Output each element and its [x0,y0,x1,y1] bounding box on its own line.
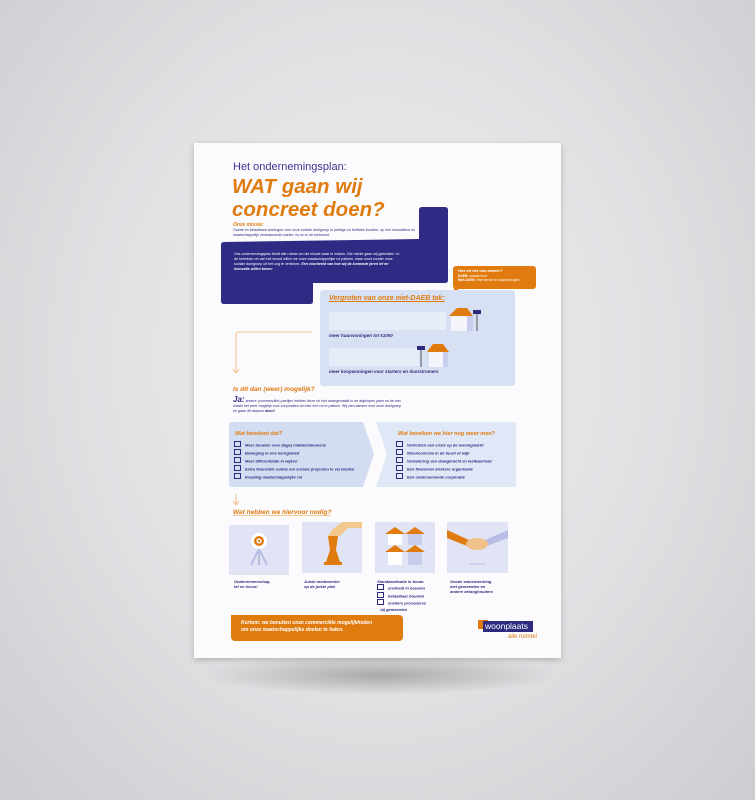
title: concreet doen? [232,198,385,221]
chevron panel right [376,422,516,487]
chevron panel left: Meer differentiatie in wijken [245,458,297,464]
text: betaalbaar bouwen [388,593,424,598]
text: snelheid in bouwen [388,586,425,590]
icon: house 2 [417,344,449,367]
text: Goede samenwerking [450,579,491,584]
captions: lef en focus! [234,584,258,589]
text: Standaardisatie in bouw: bij gemeenten [377,579,424,612]
text ja: Ja: andere (commerciële) partijen hebben deze rol niet waargemaakt in de afgelopen jaren en de wet maakt het weer mogelijk voor corporaties om hier een rol te pakken. Wij zien kansen voor onze doelgroep en gaan dit daarom doen! [233,395,401,413]
callout orange: DAEB: sociale huur [458,274,487,278]
icon: handshake [447,522,508,573]
mission text: Onze missie: [233,222,264,228]
chevron panel right: Verlichten van crisis op de woningmarkt [407,442,484,448]
icon: house [449,308,481,331]
heading mogelijk: Is dit dan (weer) mogelijk? [233,386,315,393]
text: andere belanghouders [450,589,493,594]
logo: alle ruimte! [508,634,537,640]
icon: chess [302,522,362,573]
heading nodig: Wat hebben we hiervoor nodig? [233,509,331,516]
chevron panel left: Beweging in ons kerngebied [245,450,299,456]
panel niet-DAEB: meer huurwoningen tot €1000 [329,333,393,338]
chevron panel left [229,422,374,487]
mission text [233,222,415,237]
navy block [221,207,448,304]
chevron panel left: Invulling maatschappelijke rol [245,474,302,480]
bottom callout: Kortom: we benutten onze commerciële mogelijkheden [241,620,372,626]
title: WAT gaan wij [232,175,363,198]
icon: houses puzzle [375,522,435,573]
panel niet-DAEB: meer koopwoningen voor starters en doorstromers [329,369,439,374]
mission text: Goede en betaalbare woningen voor onze sociale doelgroep in prettige en leefbare buurten, op een innovatieve en maatschappelijk verantwoorde manier, nu en in de toekomst. [233,228,415,237]
chevron panel left: Extra financiële ruimte om sociale projecten te versnellen [245,466,354,472]
chevron panel right: Een ondernemende corporatie [407,474,465,480]
chevron panel right: Woonconcisie in de buurt of wijk [407,450,469,456]
title [232,175,385,221]
text: op de juiste plek [304,584,335,589]
arrow orange elbow [232,332,312,374]
arrow down [232,494,240,506]
chevron panel right: Wat bereiken we hier nog meer mee? [398,431,495,437]
chevron panel right: Verbetering van draagkracht en leefbaarheid [407,458,492,464]
callout orange: Hoe zit het ook alweer? [458,268,502,273]
chevron panel left: Meer bouwen voor (lage) middeninkomens [245,442,326,448]
logo [478,620,537,640]
text: met gemeenten en [450,584,485,589]
chevron panel left: Wat betekent dat? [235,431,282,437]
navy text: Ons ondernemingsplan biedt alle ruimte om die missie waar te maken. Die ruimte gaan wij gebruiken. In de breedste zin van het woord willen we onze maatschappelijke rol pakken, maar nooit zonder onze sociale doelgroep uit het oog te verliezen. Een voorbeeld van hoe wij de komende jaren lef en innovatie willen tonen: [234,252,399,271]
chevron panel right: Een financieel sterkere organisatie [407,466,473,472]
captions [234,579,270,589]
panel niet-DAEB: Vergroten van onze niet-DAEB tak: [329,295,445,302]
bottom callout: om onze maatschappelijke doelen te halen. [241,626,344,632]
shadow [200,655,560,695]
captions: Ondernemerschap, [234,579,270,584]
bottom callout [231,615,403,641]
panel niet-DAEB [320,290,515,386]
text: Juiste medewerker [304,579,340,584]
text: snellere procedures [388,600,426,606]
callout orange [453,266,536,289]
poster [194,143,561,658]
subtitle: Het ondernemingsplan: [233,161,347,173]
icon: target [229,525,289,575]
callout orange: Niet-DAEB: vrije sector en koopwoningen [458,278,519,282]
logo: woonplaats [485,621,528,631]
